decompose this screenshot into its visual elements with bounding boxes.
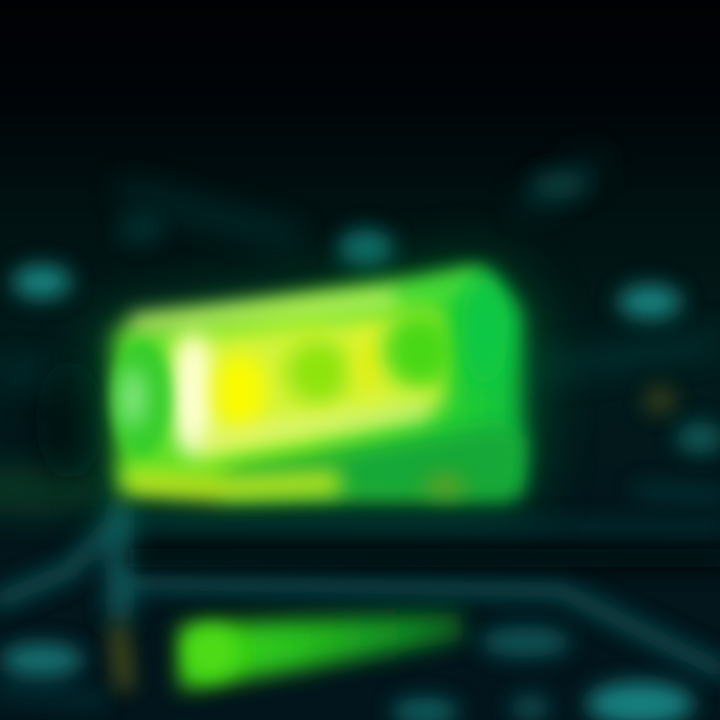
terminal end xyxy=(114,340,170,456)
terminal highlight xyxy=(121,368,145,428)
battery reflection xyxy=(118,612,465,690)
lower pale band xyxy=(205,410,430,442)
lower traces xyxy=(0,490,720,700)
reflection amber edge xyxy=(118,625,125,690)
amber spot xyxy=(644,386,676,414)
yellow bottom edge xyxy=(125,480,340,488)
battery body xyxy=(114,268,522,492)
dark lower-right side xyxy=(220,425,525,500)
core bright band xyxy=(170,310,445,458)
yellow cell xyxy=(214,354,266,430)
battery xyxy=(114,268,525,500)
lime cell xyxy=(286,340,350,404)
circuit board traces and nodes xyxy=(0,160,720,720)
reflection core xyxy=(186,626,238,678)
yellow divider xyxy=(356,329,380,401)
reflection main xyxy=(180,612,465,690)
left shadow xyxy=(36,360,104,480)
upper traces xyxy=(0,160,720,380)
right end xyxy=(461,275,509,385)
lower nodes xyxy=(0,627,694,720)
top bright edge xyxy=(130,298,400,325)
left green haze xyxy=(0,464,110,516)
teal nodes xyxy=(12,171,720,454)
battery glow xyxy=(100,262,535,500)
amber bottom spot xyxy=(425,475,465,497)
green cell xyxy=(384,312,456,388)
white highlight xyxy=(171,333,215,457)
dark band under battery xyxy=(130,548,720,568)
